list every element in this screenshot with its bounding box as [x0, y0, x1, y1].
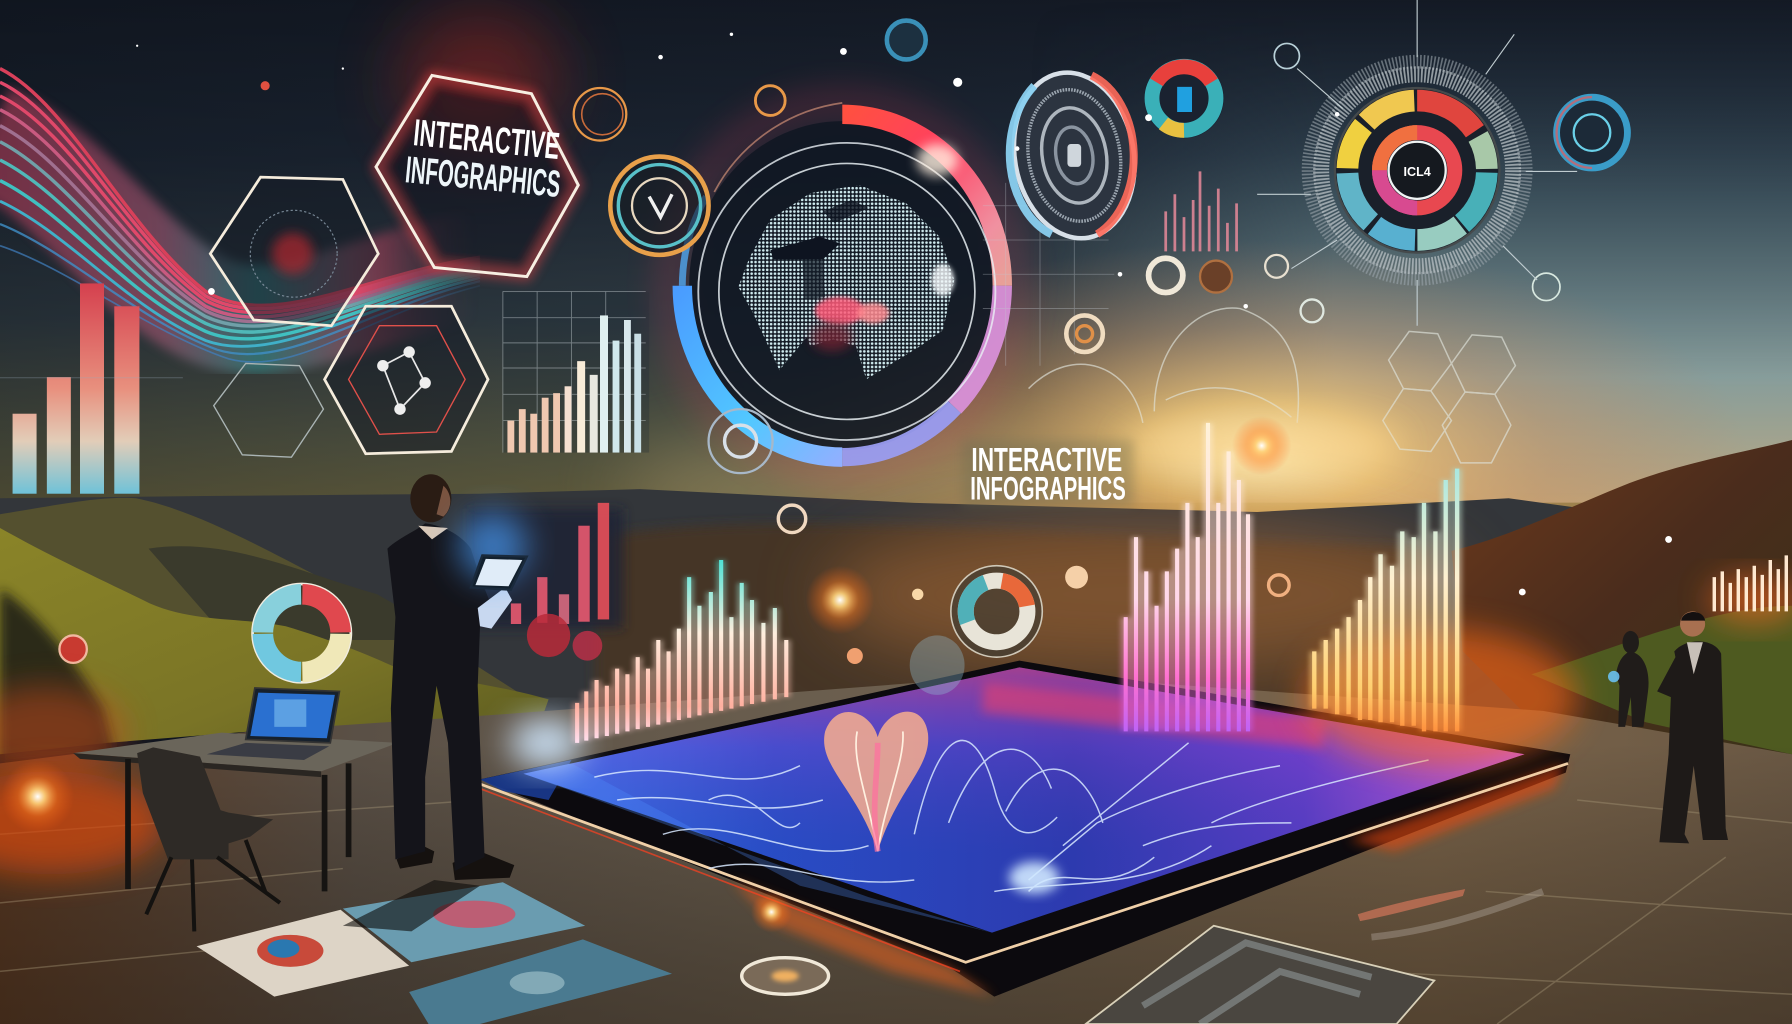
right green slope — [1531, 606, 1792, 754]
far right bars — [1709, 555, 1792, 623]
left green hill — [0, 528, 549, 754]
heart shape — [824, 712, 928, 851]
radial chart connectors — [1257, 0, 1577, 326]
sun flare — [1125, 416, 1399, 475]
background sky — [0, 0, 1792, 512]
secondary title — [962, 440, 1134, 506]
hexagon cluster right — [1029, 308, 1515, 463]
secondary title: INFOGRAPHICS — [970, 470, 1126, 506]
distant landscape — [0, 489, 1792, 731]
globe with orbit rings — [671, 103, 1114, 469]
laptop — [207, 688, 339, 760]
handheld tablet — [471, 555, 527, 590]
floor drawings right — [1086, 889, 1543, 1024]
ring: teal red blue — [1144, 58, 1224, 138]
ring: orange teal left of globe — [610, 157, 709, 255]
hexagon: red target — [210, 177, 378, 326]
screen line art — [594, 740, 1429, 891]
title text: INTERACTIVE — [412, 111, 561, 167]
sparkles — [136, 33, 1672, 664]
right brown hill — [1451, 440, 1792, 754]
person with tablet — [343, 474, 527, 931]
small ring icons — [59, 21, 1560, 663]
wooden ground — [0, 674, 1792, 1024]
title text: INFOGRAPHICS — [404, 148, 562, 205]
foreground person — [1657, 611, 1728, 843]
orb cluster near neon bars — [527, 566, 965, 695]
small donut chart — [951, 566, 1042, 657]
secondary title: INTERACTIVE — [971, 442, 1122, 479]
left bar chart — [0, 283, 183, 494]
small equalizer upper right — [1166, 171, 1237, 251]
floor ring — [742, 958, 829, 994]
bar chart: centre panel — [503, 291, 649, 453]
hill shadow left — [0, 589, 114, 766]
papers on floor — [197, 882, 672, 1024]
chart centre label: ICL4 — [1404, 165, 1431, 179]
dark panel behind person — [469, 509, 623, 629]
neon bars left — [577, 560, 786, 743]
hexagon: title — [376, 75, 578, 277]
bar chart behind person — [511, 503, 609, 624]
ground light spots — [742, 891, 829, 994]
tablet platform — [480, 661, 1570, 997]
ring: blue right — [1557, 97, 1627, 168]
neon bars centre — [1126, 423, 1248, 731]
disc — [1001, 63, 1147, 248]
globe continents — [738, 185, 954, 379]
background person — [1616, 631, 1649, 727]
radial chart — [1309, 62, 1526, 279]
chair — [137, 747, 280, 931]
two people right — [1608, 611, 1728, 843]
chart segments — [1347, 101, 1487, 240]
data wave ribbon — [0, 69, 480, 362]
fire glow left — [0, 686, 166, 874]
hexagon: network — [325, 306, 488, 454]
desk with laptop — [73, 688, 398, 931]
title text — [404, 111, 566, 205]
donut chart left — [253, 584, 351, 682]
neon bars right — [1303, 469, 1577, 766]
tablet screen — [510, 667, 1525, 933]
hexagon: faint outline — [214, 363, 323, 457]
